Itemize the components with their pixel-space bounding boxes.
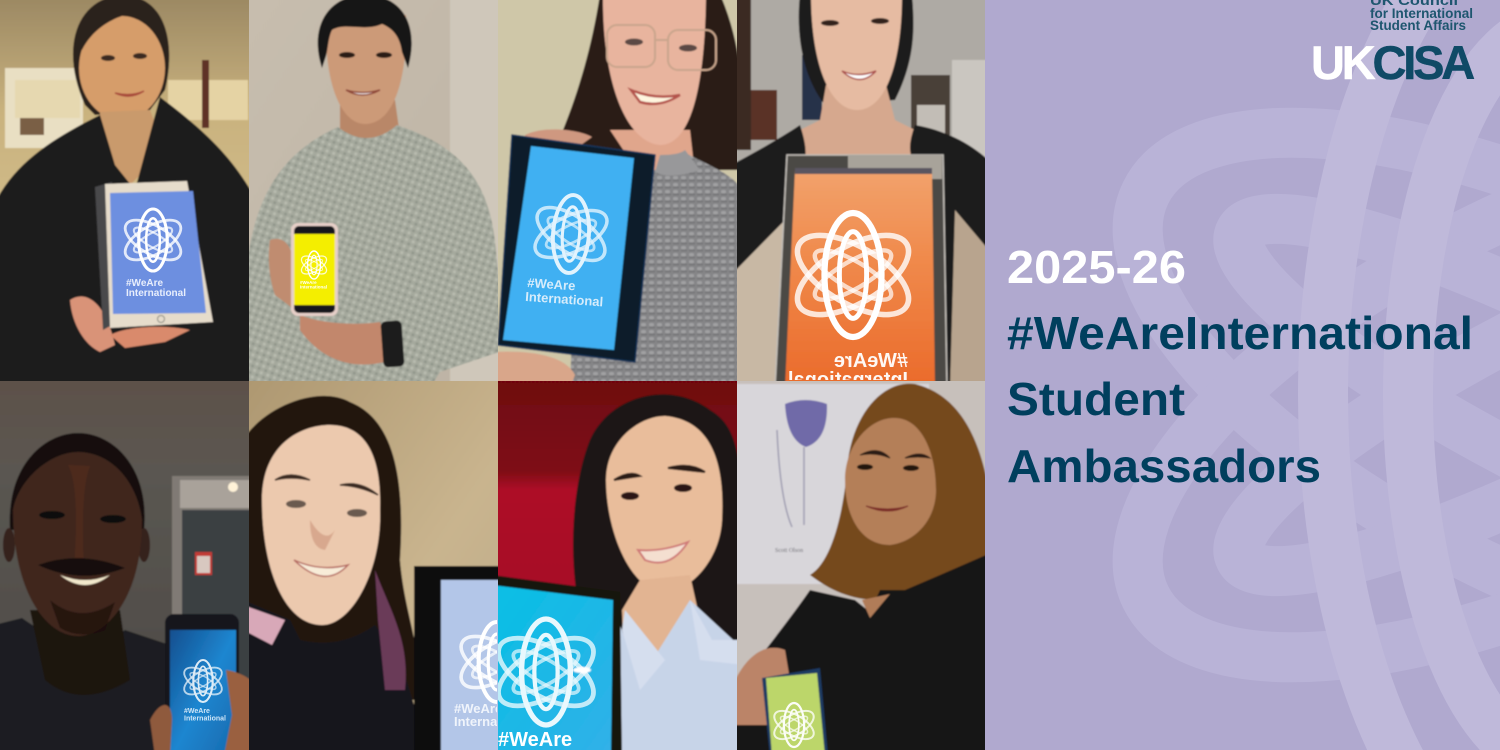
organisation full name xyxy=(1370,0,1473,33)
logo on cyan tablet xyxy=(498,616,596,728)
tablet caption: #WeAre xyxy=(454,701,502,716)
UKCISA wordmark: UKCISA xyxy=(1311,36,1474,89)
year: 2025-26 xyxy=(1007,241,1186,293)
logo on orange tablet xyxy=(785,213,921,337)
photo: student with blue tablet and glasses xyxy=(492,0,744,388)
tablet caption: International xyxy=(126,288,186,299)
poster flower xyxy=(777,400,827,527)
photo: student with yellow phone xyxy=(243,0,505,388)
logo on blue phone xyxy=(180,660,226,702)
poster caption: Scott Olson xyxy=(775,548,803,554)
tablet caption: International xyxy=(454,714,532,729)
photo: student with green phone xyxy=(731,376,993,750)
mirrored tablet caption: International xyxy=(788,369,908,391)
logo on blue tablet xyxy=(119,209,187,271)
photo: student with cyan tablet on red background xyxy=(488,376,744,750)
logo on green phone xyxy=(770,703,818,747)
mirrored tablet caption xyxy=(789,353,908,380)
heading line: Ambassadors: Ambassadors xyxy=(1007,440,1321,492)
campaign hashtag: #WeAreInternational xyxy=(1007,307,1473,359)
organisation full name: for International xyxy=(1370,5,1473,21)
tablet caption: #WeAre xyxy=(126,278,163,289)
photo: student with blue phone xyxy=(0,376,256,750)
phone caption: International xyxy=(184,716,226,722)
mirrored tablet caption: #WeAre xyxy=(834,350,908,372)
photo: student with pale blue tablet xyxy=(249,381,498,750)
tablet caption: #WeAre xyxy=(527,275,576,293)
logo on blue tablet xyxy=(533,193,609,275)
title block xyxy=(1007,241,1473,492)
logo on yellow phone xyxy=(299,251,329,279)
heading line: Student: Student xyxy=(1007,373,1185,425)
phone caption: International xyxy=(300,284,327,290)
organisation full name: Student Affairs xyxy=(1370,17,1466,33)
phone caption: #WeAre xyxy=(184,708,210,715)
phone caption: #WeAre xyxy=(300,280,317,285)
photo: student with mirrored orange tablet xyxy=(731,0,993,391)
background atom watermark xyxy=(1113,0,1500,750)
tablet caption: International xyxy=(525,289,604,309)
photo: student with blue tablet xyxy=(0,0,256,388)
logo on pale blue tablet xyxy=(459,620,497,704)
panel: right lilac background xyxy=(985,0,1500,750)
logo: UKCISA xyxy=(1311,0,1474,89)
